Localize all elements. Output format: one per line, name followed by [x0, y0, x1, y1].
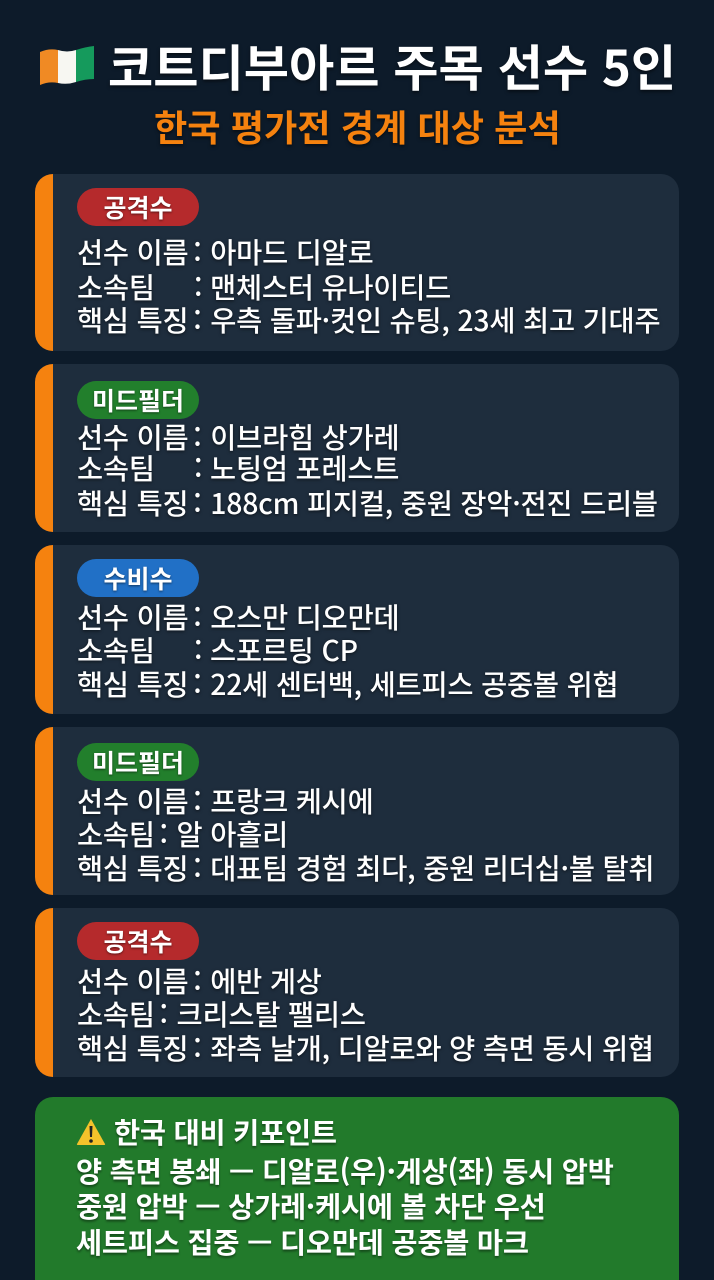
text: key traits: 핵심 특징 : 우측 돌파·컷인 슈팅, 23세 최고 기대주	[77, 299, 660, 340]
text: team	[77, 266, 451, 307]
badge: defender: 수비수	[103, 560, 172, 596]
panel: player card 3: : 스포르팅 CP	[194, 629, 358, 670]
badge: forward	[77, 188, 199, 226]
heading: Korea key points: 한국 대비 키포인트	[114, 1111, 337, 1152]
text: team	[77, 447, 399, 488]
text: key traits: 핵심 특징 : 22세 센터백, 세트피스 공중볼 위협	[77, 663, 618, 704]
badge: midfielder: 미드필더	[92, 744, 184, 780]
text: key point 1: 양 측면 봉쇄 — 디알로(우)·게상(좌) 동시 압박	[76, 1150, 614, 1191]
text: player name: 선수 이름 : 이브라힘 상가레	[77, 416, 399, 457]
text: team: 소속팀 : 크리스탈 팰리스	[77, 993, 366, 1034]
panel: player card 2: : 노팅엄 포레스트	[194, 447, 399, 488]
text: team: 소속팀	[77, 629, 155, 670]
icon: warning sign	[76, 1119, 106, 1145]
text: player name: 선수 이름 : 아마드 디알로	[77, 231, 374, 272]
panel: player card 3	[35, 545, 679, 714]
text: team	[77, 629, 358, 670]
text: key point 3: 세트피스 집중 — 디오만데 공중볼 마크	[76, 1221, 529, 1262]
text: team: 소속팀	[77, 266, 155, 307]
text: player name: 선수 이름 : 에반 게상	[77, 960, 322, 1001]
badge: forward	[77, 922, 199, 960]
panel: player card 1	[35, 174, 679, 351]
panel: player card 1: : 맨체스터 유나이티드	[194, 266, 451, 307]
title: 코트디부아르 주목 선수 5인	[108, 30, 676, 101]
text: player name: 선수 이름 : 프랑크 케시에	[77, 780, 374, 821]
badge: midfielder: 미드필더	[92, 382, 184, 418]
badge: forward: 공격수	[103, 923, 172, 959]
text: key traits: 핵심 특징 : 좌측 날개, 디알로와 양 측면 동시 위협	[77, 1027, 654, 1068]
panel: player card 2	[35, 364, 679, 532]
badge: forward: 공격수	[103, 189, 172, 225]
panel: player card 4	[35, 727, 679, 895]
panel: player card 5	[35, 908, 679, 1077]
text: team: 소속팀	[77, 447, 155, 488]
panel: Korea key points	[35, 1097, 679, 1280]
text: key traits: 핵심 특징 : 188cm 피지컬, 중원 장악·전진 드리블	[77, 482, 658, 523]
text: key point 2: 중원 압박 — 상가레·케시에 볼 차단 우선	[76, 1185, 546, 1226]
text: key traits: 핵심 특징 : 대표팀 경험 최다, 중원 리더십·볼 탈취	[77, 847, 654, 888]
badge: defender	[77, 559, 199, 597]
text: team: 소속팀 : 알 아흘리	[77, 813, 288, 854]
subtitle: 한국 평가전 경계 대상 분석	[154, 100, 561, 152]
icon: Ivory Coast flag	[40, 46, 94, 85]
text: player name: 선수 이름 : 오스만 디오만데	[77, 596, 399, 637]
